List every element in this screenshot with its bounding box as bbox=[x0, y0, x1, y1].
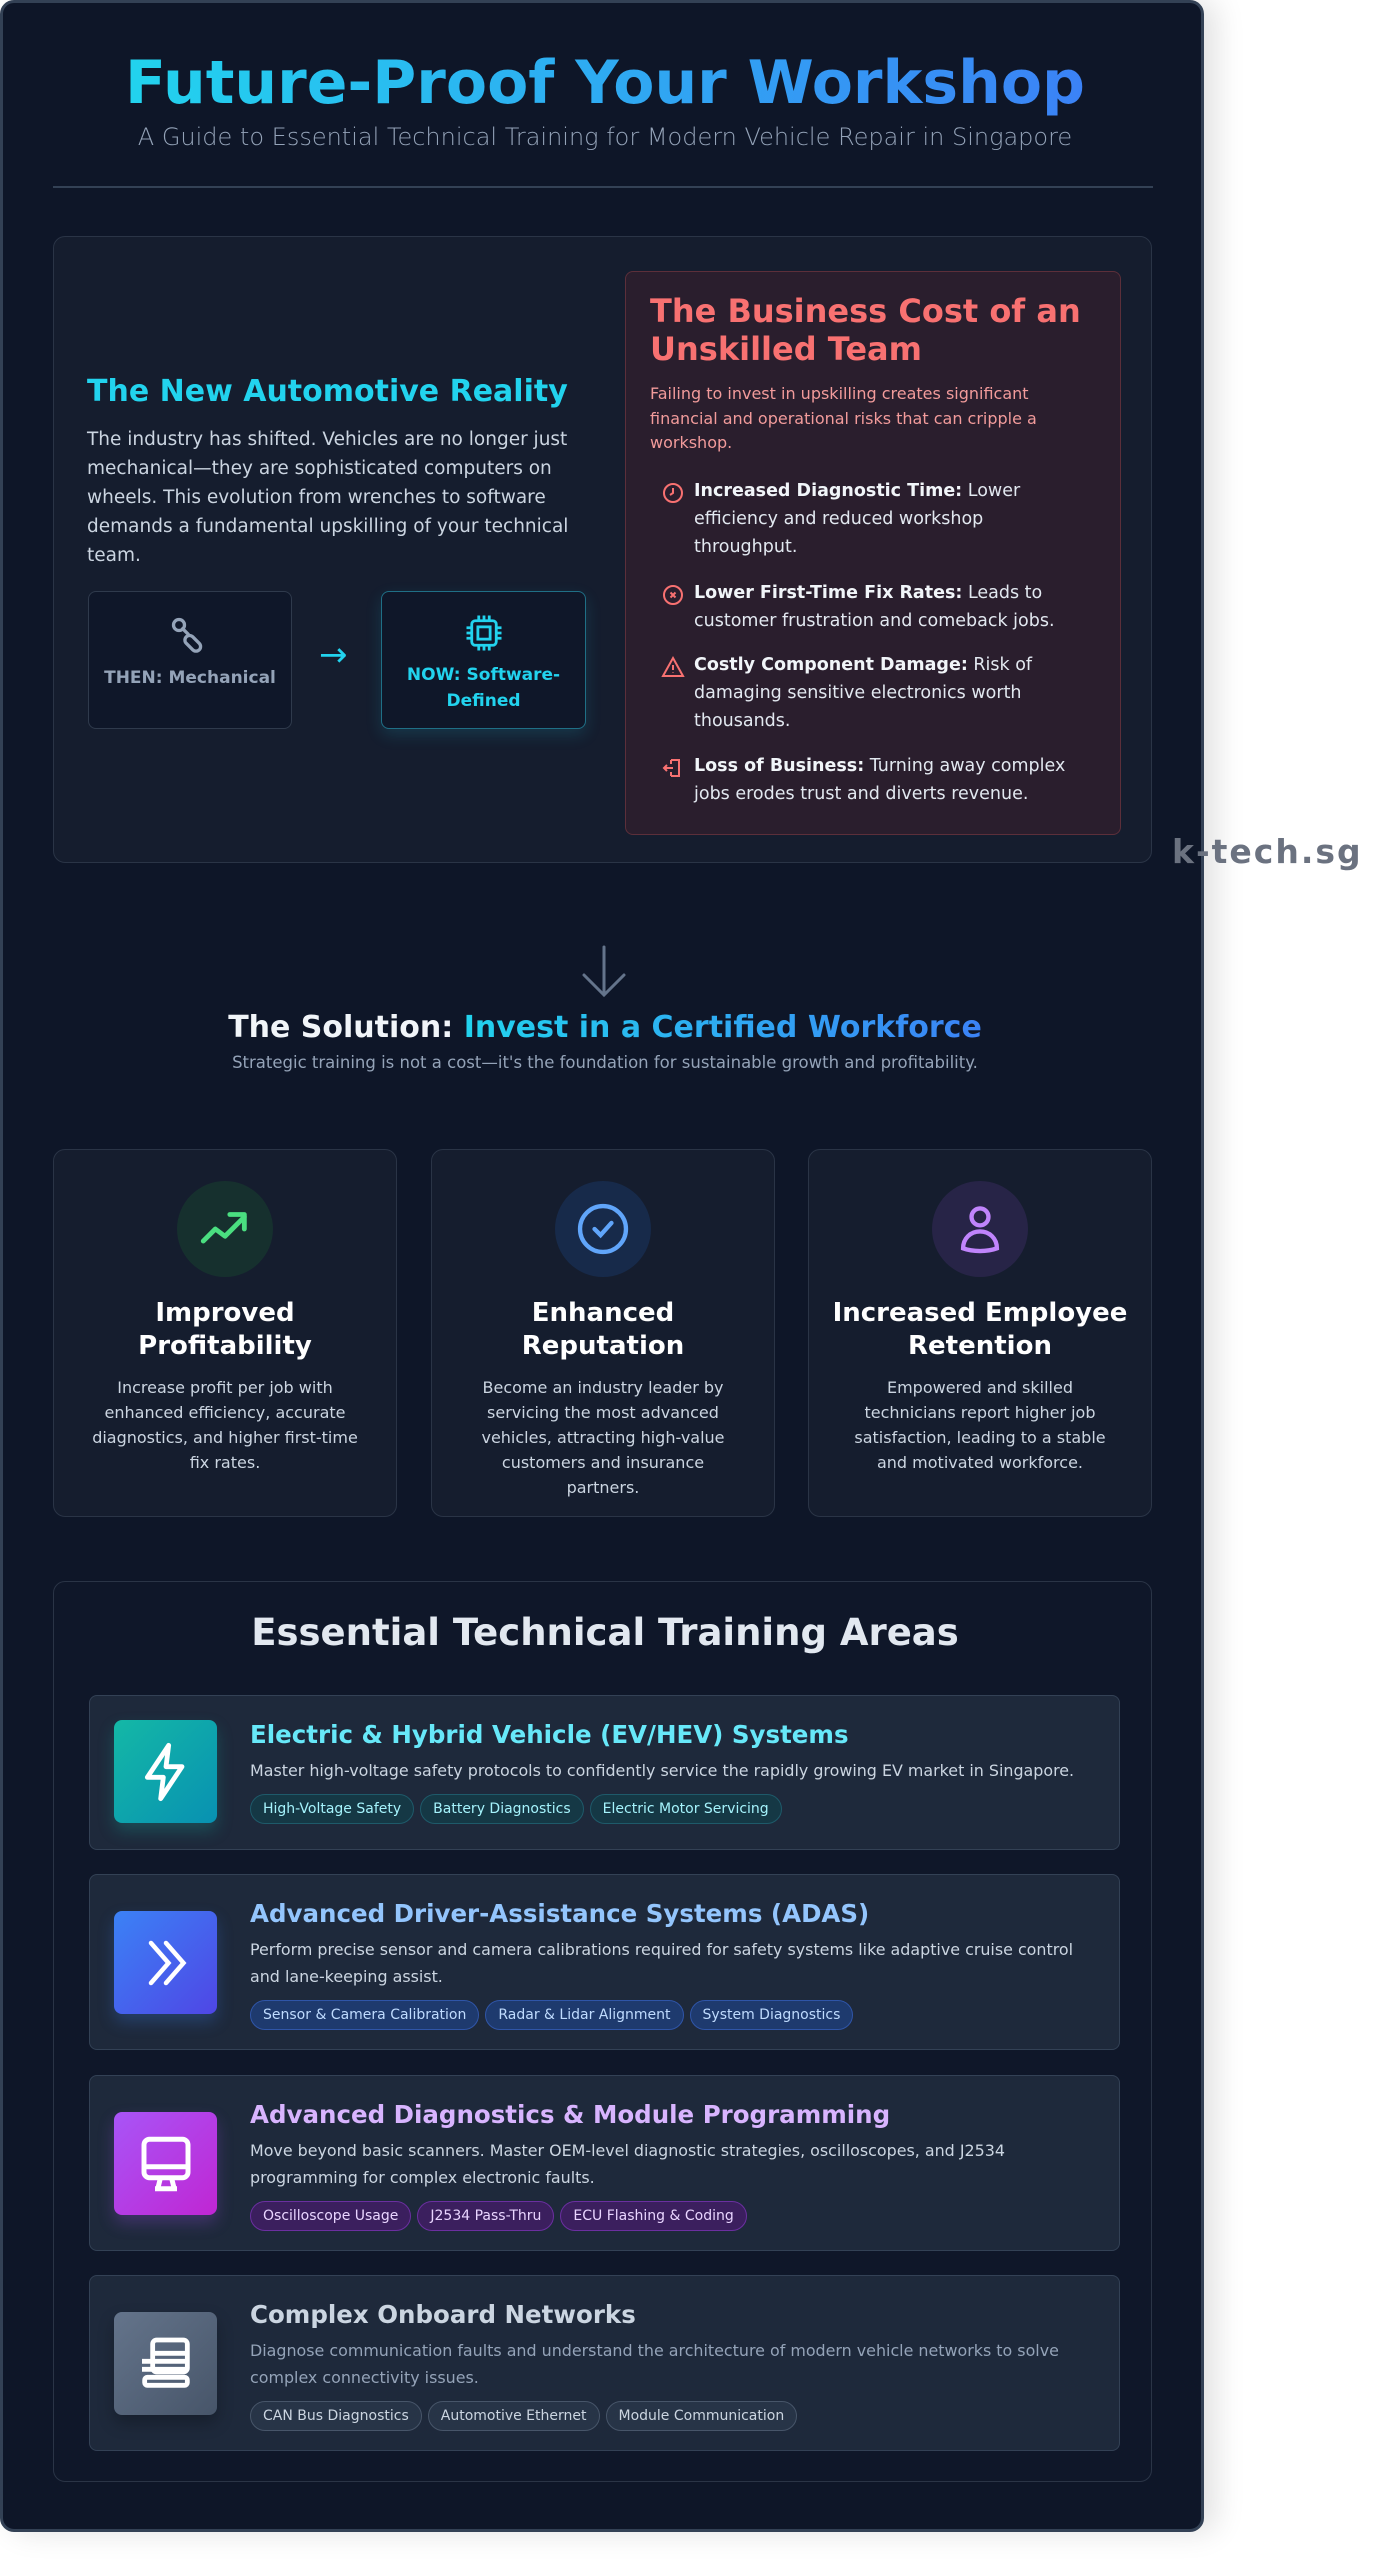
icon: chip bbox=[466, 616, 502, 650]
heading: solution: The Solution: Invest in a Certified Workforce bbox=[228, 1010, 982, 1045]
list of risks bbox=[661, 481, 1065, 804]
icon: monitor bbox=[114, 2112, 217, 2215]
box: now software: Defined bbox=[446, 691, 521, 711]
arrow: → bbox=[319, 635, 348, 675]
item: networks: CAN Bus Diagnostics bbox=[263, 2408, 409, 2424]
box: then mechanical bbox=[88, 591, 292, 729]
item: ADAS: System Diagnostics bbox=[703, 2007, 840, 2023]
item: diagnostics: J2534 Pass-Thru bbox=[430, 2208, 541, 2224]
watermark: k-tech.sg bbox=[1172, 832, 1363, 871]
subtitle: A Guide to Essential Technical Training for Modern Vehicle Repair in Singapore bbox=[138, 123, 1072, 151]
card: reputation: Become an industry leader by servicing the most advanced vehicles, attracting high-value customers and insurance partners. bbox=[481, 1378, 725, 1497]
title: Future-Proof Your Workshop bbox=[125, 48, 1085, 118]
box: then mechanical: THEN: Mechanical bbox=[104, 668, 276, 688]
item: EV: Electric Motor Servicing bbox=[603, 1801, 769, 1817]
card: reputation bbox=[431, 1149, 775, 1517]
box: now software: NOW: Software- bbox=[407, 665, 560, 685]
item: ADAS: Radar & Lidar Alignment bbox=[498, 2007, 671, 2023]
panel: business cost bbox=[625, 271, 1121, 835]
panel: new reality bbox=[53, 236, 1152, 863]
card: profitability bbox=[53, 1149, 397, 1517]
item: networks: Complex Onboard Networks bbox=[250, 2300, 636, 2329]
panel: training areas bbox=[53, 1581, 1152, 2482]
card: profitability: Increase profit per job with enhanced efficiency, accurate diagnostics, and higher first-time fix rates. bbox=[92, 1378, 358, 1472]
heading: business cost: The Business Cost of an Unskilled Team bbox=[650, 292, 1081, 368]
icon: network stack bbox=[114, 2312, 217, 2415]
subtitle: solution: Strategic training is not a cost—it's the foundation for sustainable growth and profitability. bbox=[232, 1053, 978, 1072]
item: diagnostics: Advanced Diagnostics & Module Programming bbox=[250, 2100, 890, 2129]
heading: new automotive reality: The New Automotive Reality bbox=[87, 374, 568, 409]
item: ADAS bbox=[89, 1874, 1120, 2050]
item: diagnostics: Oscilloscope Usage bbox=[263, 2208, 398, 2224]
item: EV: Electric & Hybrid Vehicle (EV/HEV) Systems bbox=[250, 1720, 849, 1749]
icon: chevrons bbox=[114, 1911, 217, 2014]
item: networks: Module Communication bbox=[618, 2408, 784, 2424]
card: profitability: Improved Profitability bbox=[138, 1298, 312, 1361]
card: reputation: Enhanced Reputation bbox=[522, 1298, 684, 1361]
item: EV: Master high-voltage safety protocols to confidently service the rapidly growing EV market in Singapore. bbox=[250, 1761, 1074, 1780]
risk: diagnostic time: Increased Diagnostic Time: Lower efficiency and reduced workshop throughput. bbox=[694, 481, 1020, 557]
item: ADAS: Sensor & Camera Calibration bbox=[263, 2007, 466, 2023]
item: ADAS: Perform precise sensor and camera calibrations required for safety systems like adaptive cruise control and lane-keeping assist. bbox=[250, 1940, 1073, 1986]
item: ADAS: Advanced Driver-Assistance Systems (ADAS) bbox=[250, 1899, 869, 1928]
risk: component damage: Costly Component Damage: Risk of damaging sensitive electronics worth thousands. bbox=[694, 655, 1032, 731]
intro text: Failing to invest in upskilling creates significant financial and operational risks that can cripple a workshop. bbox=[650, 384, 1037, 452]
box: now software bbox=[381, 591, 586, 729]
text: industry shift: The industry has shifted. Vehicles are no longer just mechanical—they are sophisticated computers on wheels. This evolution from wrenches to software demands a fundamental upskilling of your technical team. bbox=[87, 429, 568, 566]
icon: check circle bbox=[555, 1181, 651, 1277]
icon: trend up bbox=[177, 1181, 273, 1277]
heading: training areas: Essential Technical Training Areas bbox=[251, 1611, 959, 1654]
item: diagnostics: Move beyond basic scanners. Master OEM-level diagnostic strategies, oscilloscopes, and J2534 programming for complex electronic faults. bbox=[250, 2141, 1005, 2187]
item: EV: Battery Diagnostics bbox=[433, 1801, 571, 1817]
risk: loss of business: Loss of Business: Turning away complex jobs erodes trust and diverts revenue. bbox=[694, 756, 1065, 804]
item: networks bbox=[89, 2275, 1120, 2451]
icon: person bbox=[932, 1181, 1028, 1277]
item: EV: High-Voltage Safety bbox=[263, 1801, 401, 1817]
card: retention: Empowered and skilled technicians report higher job satisfaction, leading to a stable and motivated workforce. bbox=[854, 1378, 1106, 1472]
item: EV bbox=[89, 1695, 1120, 1850]
item: networks: Automotive Ethernet bbox=[441, 2408, 586, 2424]
card: retention: Increased Employee Retention bbox=[833, 1298, 1127, 1361]
risk: fix rates: Lower First-Time Fix Rates: Leads to customer frustration and comeback jobs. bbox=[694, 583, 1055, 631]
card: retention bbox=[808, 1149, 1152, 1517]
arrow: down bbox=[582, 946, 626, 997]
item: diagnostics: ECU Flashing & Coding bbox=[573, 2208, 734, 2224]
icon: wrench bbox=[172, 618, 202, 653]
icon: lightning bbox=[114, 1720, 217, 1823]
item: diagnostics bbox=[89, 2075, 1120, 2251]
item: networks: Diagnose communication faults and understand the architecture of modern vehicle networks to solve complex connectivity issues. bbox=[250, 2341, 1059, 2387]
